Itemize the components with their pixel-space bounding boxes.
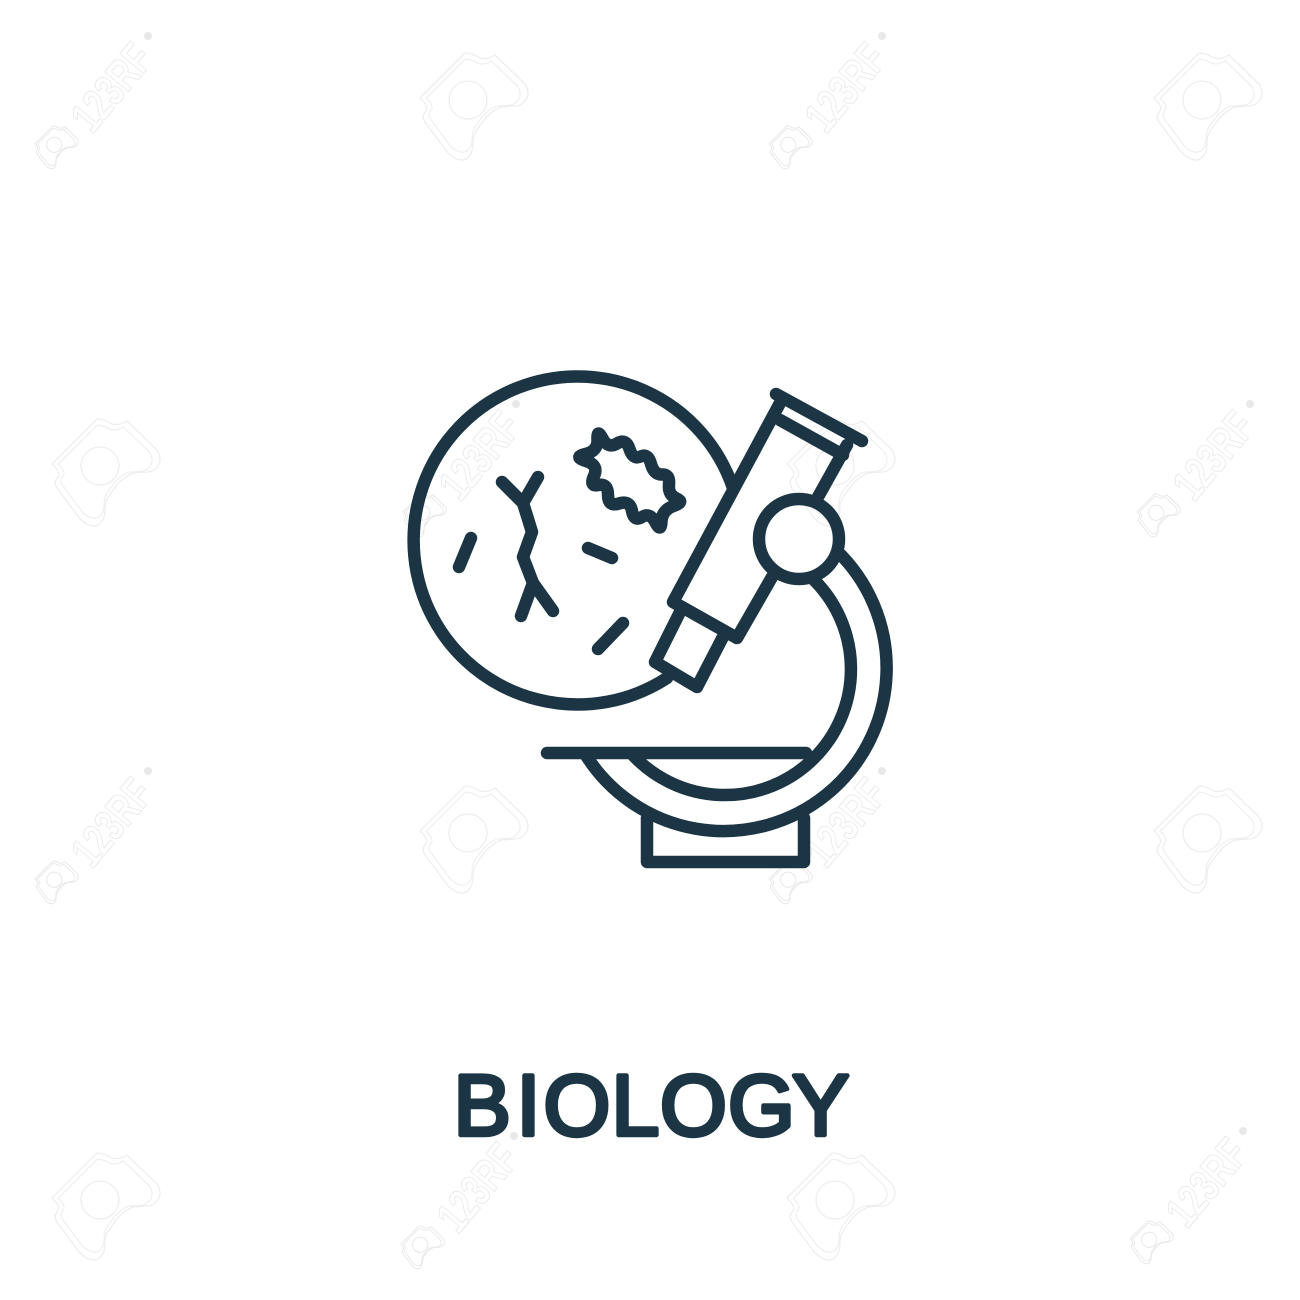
watermarks: 123RF [1156,1129,1258,1236]
title: BIOLOGY [454,1058,849,1154]
watermarks: 123RF [427,1134,529,1241]
focus knob [759,499,839,579]
microscope arm [584,550,887,831]
watermarks: 123RF [1163,402,1265,509]
wavy bacterium [579,433,680,528]
rod bacteria [459,538,623,649]
watermarks: 123RF [795,34,897,141]
magnifier circle [414,376,733,704]
microscope tube [673,394,862,638]
base [647,818,804,862]
objective lens [655,612,725,687]
watermarks: 123RF [429,402,531,509]
icon: microscope with magnified specimen [414,376,887,862]
branching microbe [502,477,553,616]
stage [547,747,806,759]
watermarks: 123RF [61,34,163,141]
watermarks: 123RF [61,769,163,876]
watermarks: 123RF [795,769,897,876]
